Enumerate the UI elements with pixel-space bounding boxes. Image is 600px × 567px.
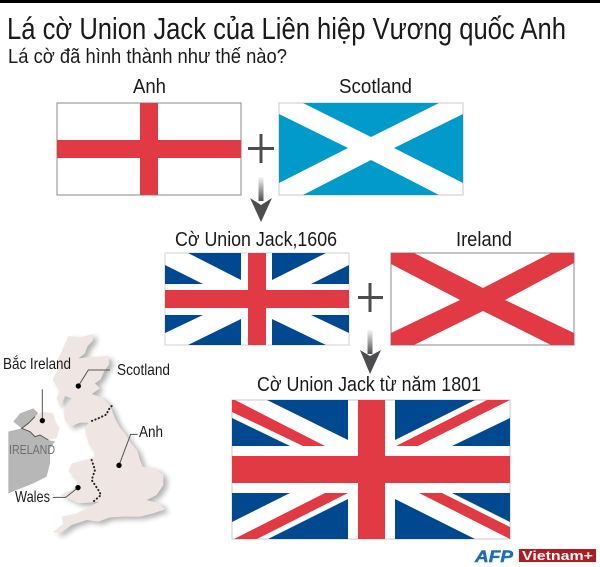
map: British Isles xyxy=(8,334,169,536)
logo: Vietnam+: Vietnam+ xyxy=(522,548,593,563)
dotted border: Scotland-England xyxy=(92,406,112,421)
label: Union Jack 1606: Cờ Union Jack,1606 xyxy=(175,229,337,251)
label: Scotland: Scotland xyxy=(339,76,412,98)
map label: Bắc Ireland: Bắc Ireland xyxy=(3,354,71,373)
logo: AFP: AFP xyxy=(474,547,514,566)
Northern Ireland border xyxy=(22,417,48,440)
leader lines xyxy=(42,370,138,497)
flag: Union Jack 1606 xyxy=(165,253,349,345)
Northern Ireland xyxy=(22,412,59,440)
map label: Scotland: Scotland xyxy=(117,362,170,379)
map label: IRELAND: IRELAND xyxy=(9,442,55,457)
Republic of Ireland xyxy=(8,408,55,493)
flag: Ireland xyxy=(391,253,574,345)
label: Anh: Anh xyxy=(133,76,166,98)
dotted border: Wales-England xyxy=(92,460,101,502)
label: Ireland: Ireland xyxy=(456,229,512,251)
label: Union Jack 1801: Cờ Union Jack từ năm 1801 xyxy=(257,374,481,396)
plus sign xyxy=(358,283,383,312)
flag: England xyxy=(57,103,241,195)
map label: Anh: Anh xyxy=(139,424,163,441)
arrow down xyxy=(250,177,272,222)
location dots xyxy=(40,383,122,490)
subtitle: Lá cờ đã hình thành như thế nào? xyxy=(8,46,287,68)
plus sign xyxy=(248,134,274,163)
flag: Scotland xyxy=(279,103,463,195)
Great Britain landmass xyxy=(53,334,165,533)
flag: Union Jack 1801 xyxy=(232,400,510,539)
map label: Wales: Wales xyxy=(15,489,50,506)
arrow down xyxy=(360,330,381,374)
map shadow xyxy=(57,337,169,536)
